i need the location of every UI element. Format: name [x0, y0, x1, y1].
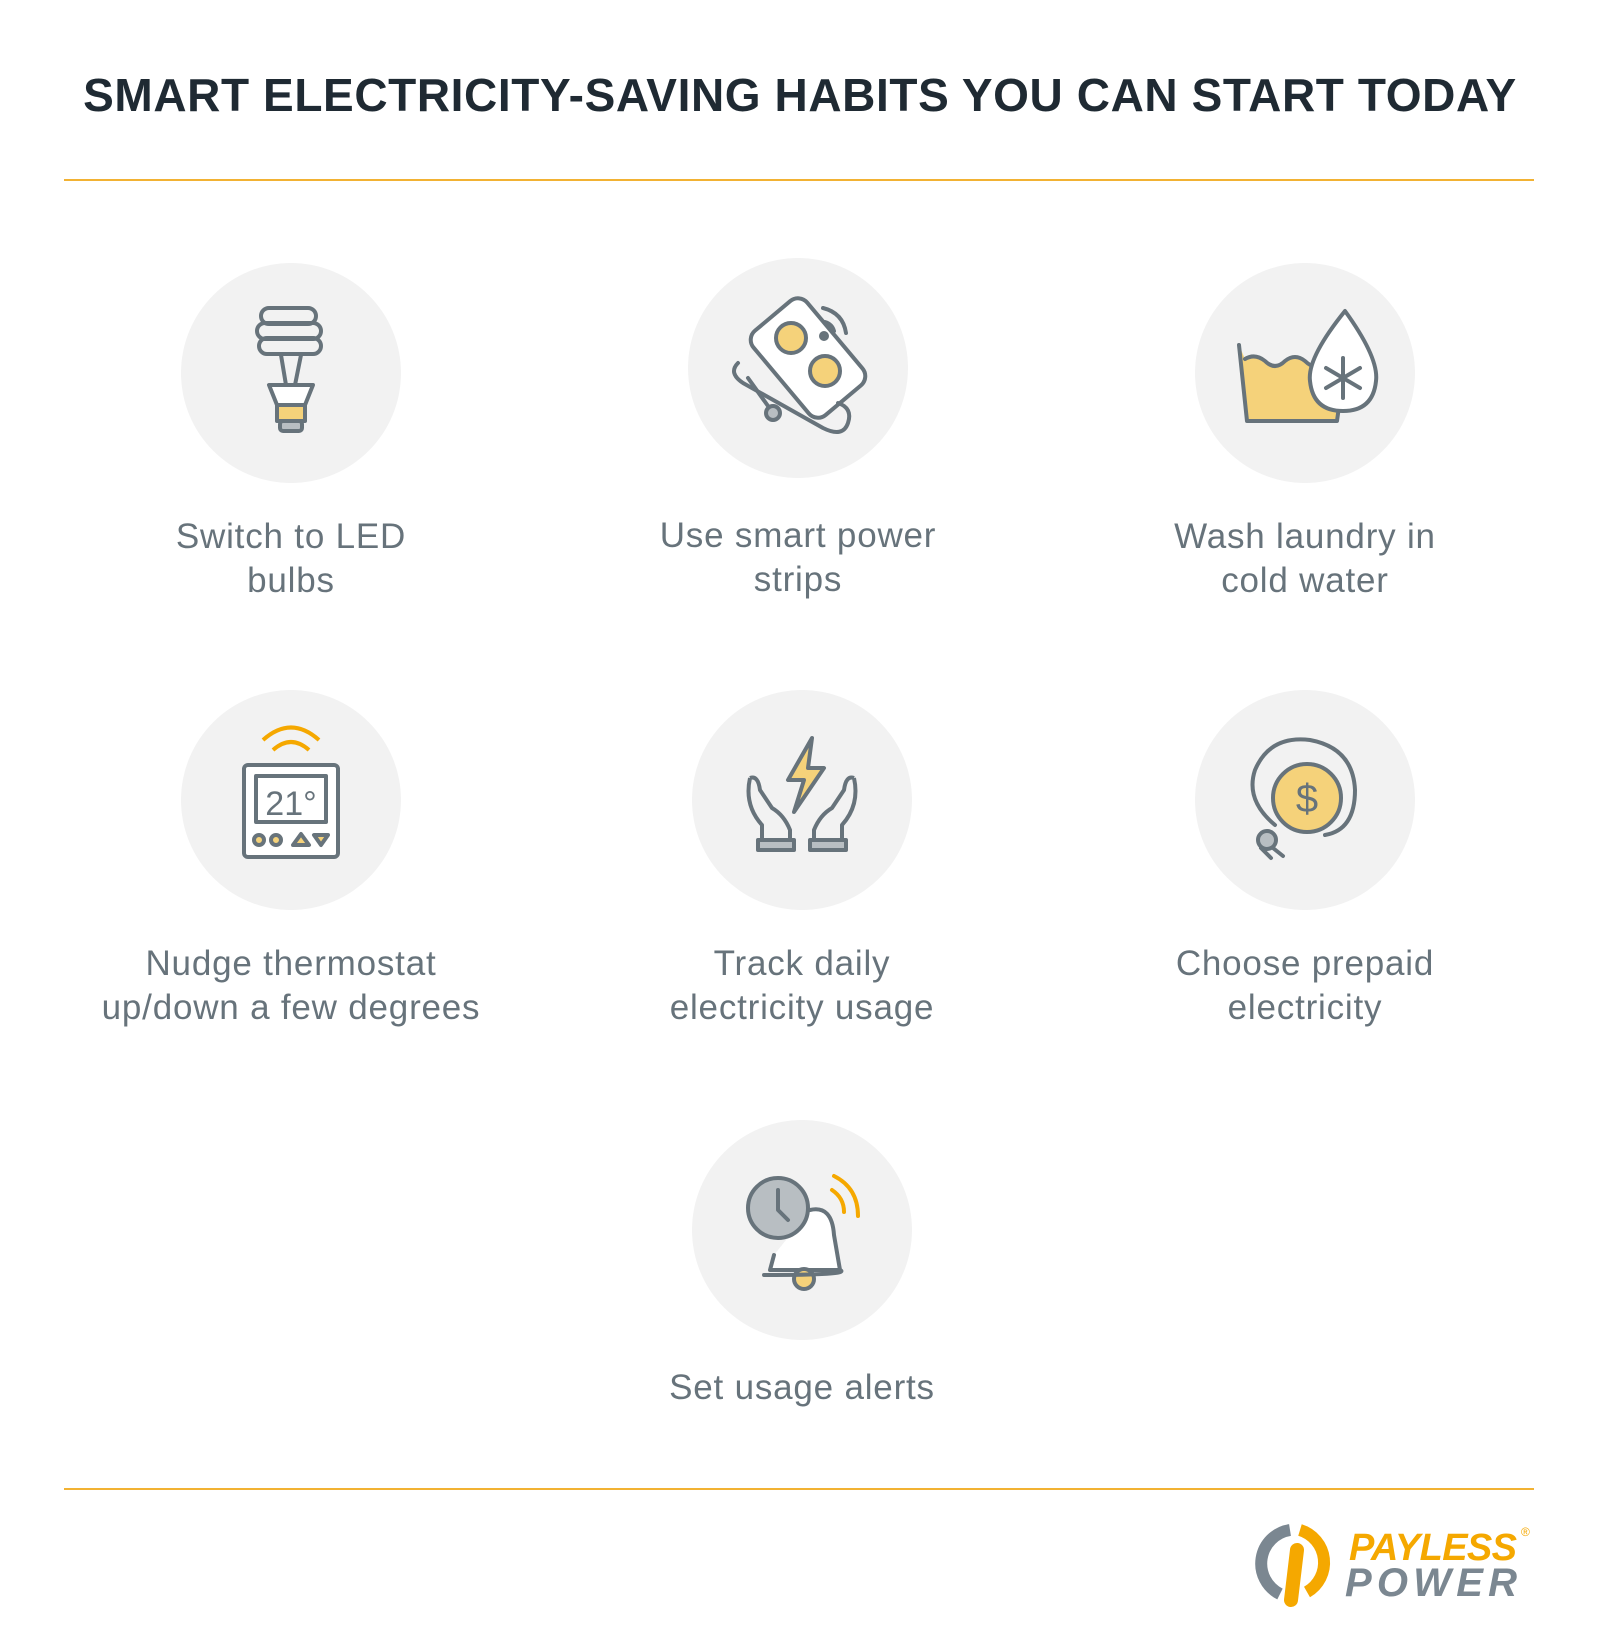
item: alerts	[669, 1120, 935, 1407]
item: thermostat: Nudge thermostat	[145, 944, 436, 983]
logo: ®	[1521, 1525, 1530, 1539]
item: alerts: Set usage alerts	[669, 1368, 935, 1407]
icon: clock bell	[692, 1120, 912, 1340]
icon: hands with bolt	[692, 690, 912, 910]
item: LED bulbs: bulbs	[247, 561, 335, 600]
item: prepaid: Choose prepaid	[1176, 944, 1434, 983]
item: thermostat: up/down a few degrees	[102, 988, 480, 1027]
title: SMART ELECTRICITY-SAVING HABITS YOU CAN START TODAY	[83, 69, 1517, 121]
item: LED bulbs: Switch to LED	[176, 517, 406, 556]
item: track usage: Track daily	[714, 944, 890, 983]
item: thermostat	[102, 690, 480, 1027]
icon: thermostat	[181, 690, 401, 910]
item: track usage: electricity usage	[670, 988, 934, 1027]
logo	[1255, 1524, 1530, 1607]
item: laundry: cold water	[1221, 561, 1389, 600]
item: laundry	[1174, 263, 1436, 600]
item: track usage	[670, 690, 934, 1027]
logo: POWER	[1345, 1561, 1517, 1605]
item: power strips: Use smart power	[660, 516, 936, 555]
logo: PAYLESS	[1349, 1527, 1517, 1569]
item: LED bulbs	[176, 263, 406, 600]
icon: tub with drop	[1195, 263, 1415, 483]
item: prepaid: electricity	[1228, 988, 1382, 1027]
icon: thermostat: 21°	[265, 785, 317, 823]
item: laundry: Wash laundry in	[1174, 517, 1436, 556]
item: power strips	[660, 258, 936, 599]
item: prepaid	[1176, 690, 1434, 1027]
icon: coin plug	[1195, 690, 1415, 910]
item: power strips: strips	[754, 560, 842, 599]
icon: bulb	[181, 263, 401, 483]
icon: power strip	[688, 258, 908, 478]
icon: coin plug: $	[1296, 777, 1318, 821]
